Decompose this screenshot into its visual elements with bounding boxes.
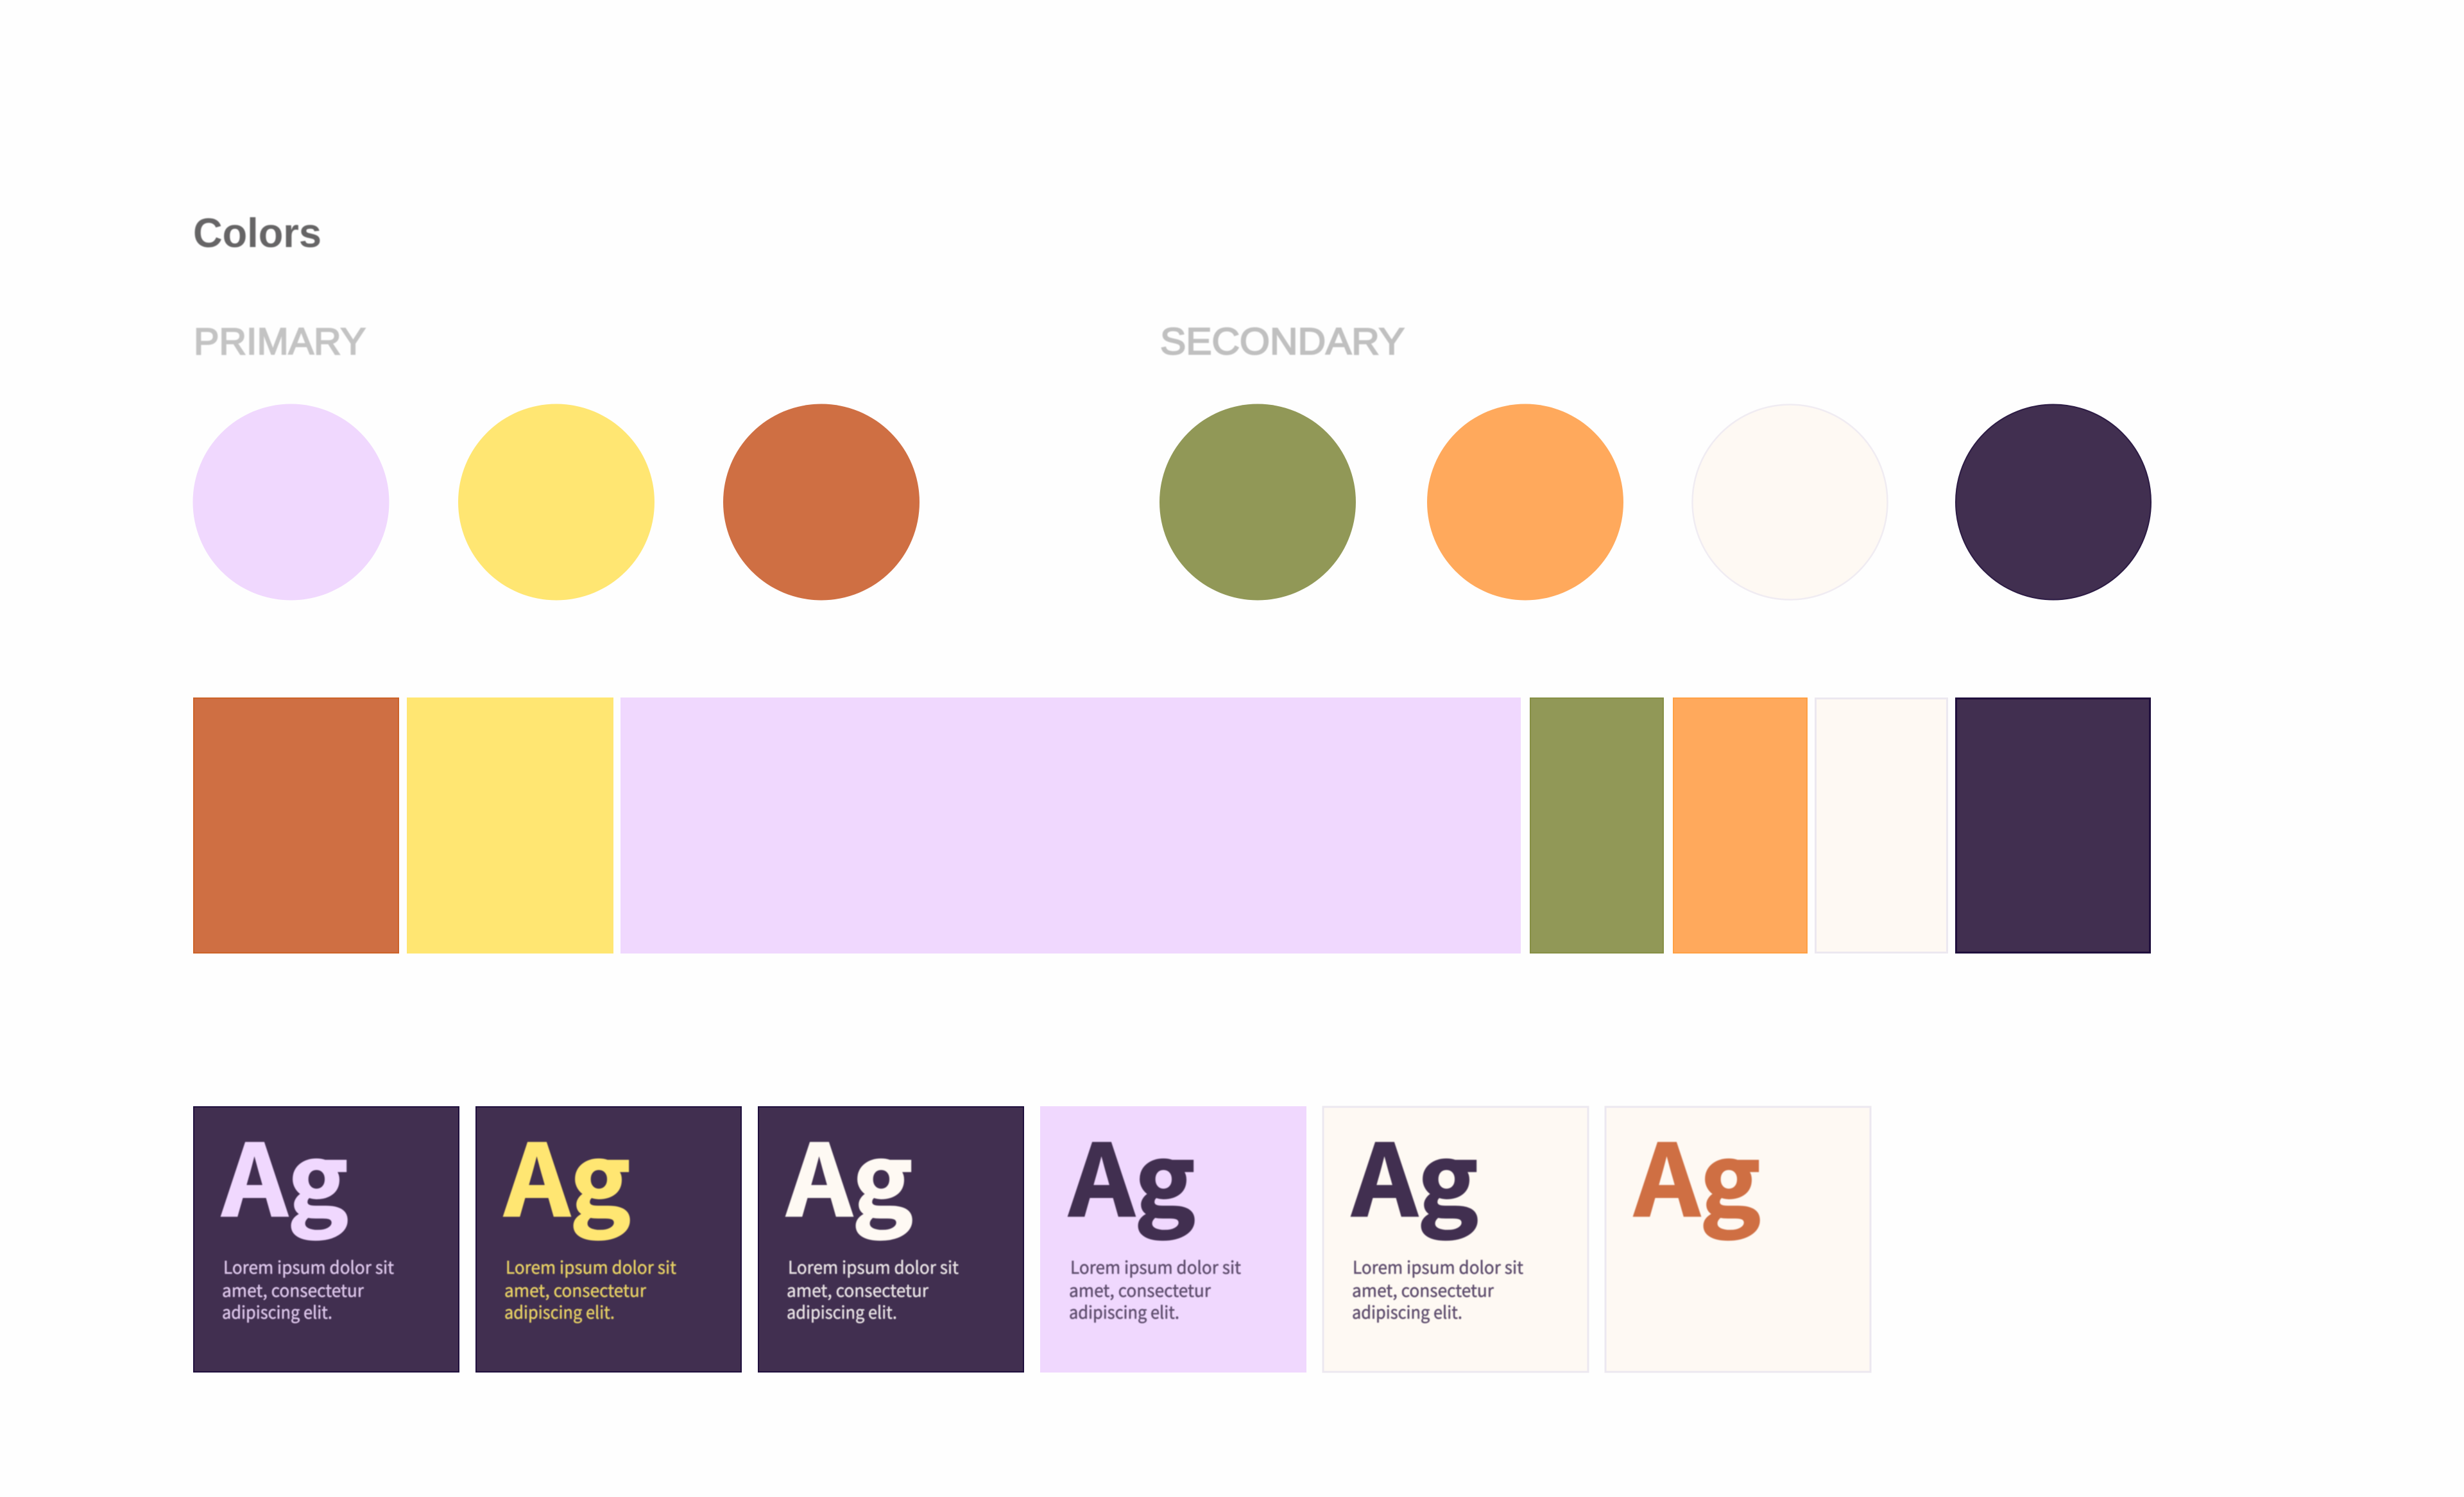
tile: lilac on dark: Ag (221, 1102, 348, 1245)
tile: dark on lilac: adipiscing elit. (1069, 1299, 1179, 1324)
tile: cream on dark (758, 1102, 1023, 1372)
tile: lilac on dark: Lorem ipsum dolor sit (223, 1254, 394, 1279)
tile: dark on cream (1323, 1102, 1588, 1372)
tile: yellow on dark (476, 1102, 741, 1372)
tile: dark on lilac: amet, consectetur (1069, 1277, 1211, 1302)
circle: orange (1427, 404, 1623, 601)
tile: dark on lilac (1040, 1102, 1306, 1373)
tile: dark on cream: adipiscing elit. (1352, 1299, 1462, 1324)
tile: dark on lilac: Lorem ipsum dolor sit (1070, 1254, 1241, 1279)
tile: yellow on dark: Ag (504, 1102, 631, 1245)
tile: cream on dark: adipiscing elit. (787, 1299, 897, 1324)
tile: cream on dark: amet, consectetur (787, 1277, 928, 1302)
bar segment: cream (1816, 698, 1947, 952)
circle: olive (1159, 404, 1356, 601)
heading: primary: PRIMARY (194, 321, 366, 363)
circle: cream (1693, 404, 1888, 599)
bar segment: orange (1673, 698, 1807, 953)
tile: yellow on dark: adipiscing elit. (504, 1299, 615, 1324)
secondary colour circles (1159, 404, 2151, 601)
tile: yellow on dark: Lorem ipsum dolor sit (506, 1254, 676, 1279)
tile: yellow on dark: amet, consectetur (504, 1277, 646, 1302)
bar segment: yellow (407, 697, 613, 954)
tile: terracotta on cream: Ag (1634, 1102, 1761, 1245)
proportional colour bar (194, 697, 2150, 954)
tile: cream on dark: Lorem ipsum dolor sit (788, 1254, 959, 1279)
tile: dark on lilac: Ag (1068, 1102, 1195, 1245)
circle: dark purple (1956, 404, 2151, 599)
bar segment: olive (1530, 698, 1663, 953)
tile: lilac on dark: adipiscing elit. (222, 1299, 332, 1324)
tile: lilac on dark: amet, consectetur (222, 1277, 364, 1302)
circle: yellow (458, 404, 654, 601)
tile: dark on cream: amet, consectetur (1352, 1277, 1494, 1302)
circle: terracotta (723, 404, 920, 601)
tile: dark on cream: Ag (1351, 1102, 1478, 1245)
tile: cream on dark: Ag (786, 1102, 913, 1245)
circle: lilac (193, 404, 389, 601)
title: Colors (193, 210, 321, 256)
tile: terracotta on cream (1605, 1102, 1870, 1372)
bar segment: dark purple (1956, 698, 2150, 952)
tile: dark on cream: Lorem ipsum dolor sit (1353, 1254, 1523, 1279)
tile: lilac on dark (194, 1102, 459, 1372)
type sample tiles (194, 1102, 1870, 1373)
bar segment: terracotta (194, 698, 398, 953)
heading: secondary: SECONDARY (1160, 321, 1405, 363)
bar segment: lilac (620, 697, 1521, 954)
primary colour circles (193, 404, 920, 601)
